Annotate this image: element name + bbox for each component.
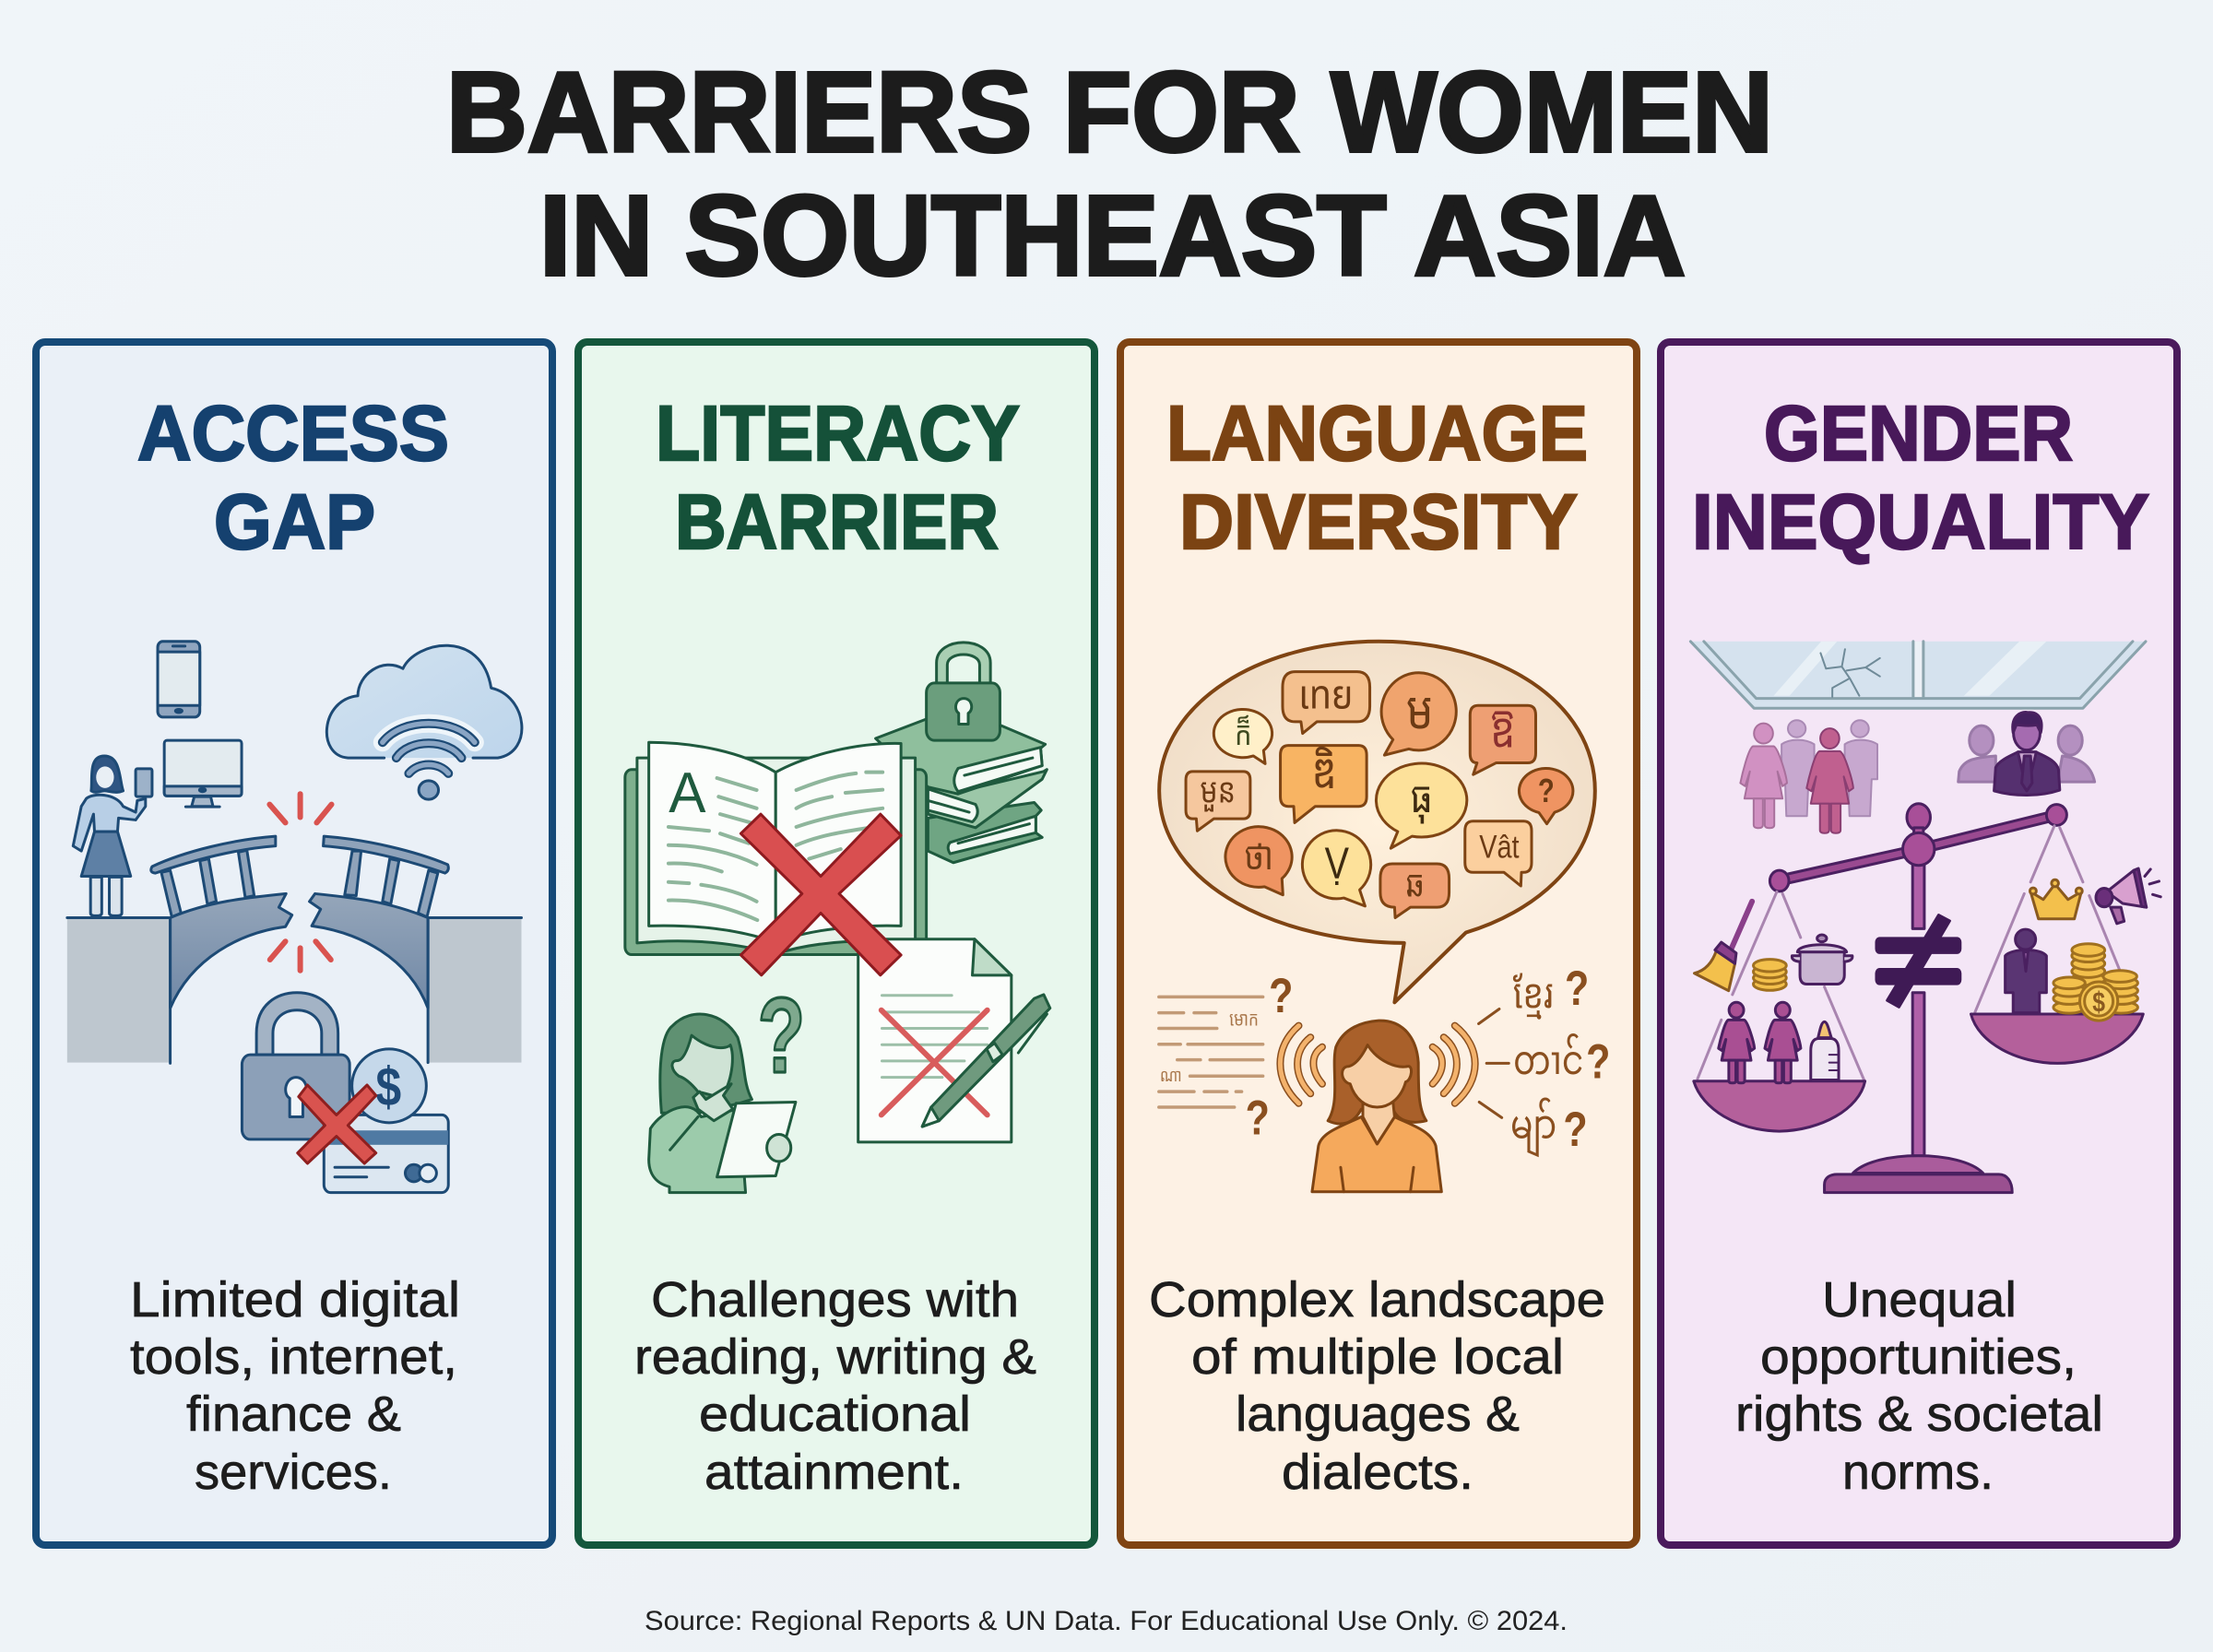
heading: gender inequality: GENDER xyxy=(1764,390,2073,477)
icon: open book: A xyxy=(669,761,706,824)
icon: women on pan xyxy=(1719,1002,1801,1083)
title xyxy=(446,50,1773,300)
description: literacy barrier: attainment. xyxy=(704,1445,964,1500)
illustration: broken bridge and digital access xyxy=(67,642,522,1193)
icon: woman listening xyxy=(1312,1021,1441,1192)
icon: megaphone xyxy=(2096,868,2160,924)
description: access gap: Limited digital xyxy=(130,1272,460,1328)
icon: broom xyxy=(1695,902,1752,991)
description: access gap xyxy=(130,1272,460,1500)
description: gender inequality: Unequal xyxy=(1822,1272,2017,1328)
cliffs xyxy=(67,918,522,1063)
icon: open book xyxy=(625,742,927,955)
icon: not equal sign xyxy=(1876,915,1960,1007)
icon: glass ceiling xyxy=(1690,642,2146,708)
icon: small coin stack xyxy=(1754,960,1786,990)
small language bubbles: เทย xyxy=(1298,671,1353,717)
large speech bubble xyxy=(1159,642,1595,1002)
small language bubbles: Ṿ xyxy=(1325,839,1349,889)
icon: stacked books with padlock xyxy=(876,643,1047,863)
description: language diversity: of multiple local xyxy=(1191,1329,1564,1385)
icon: man in suit on pan xyxy=(2006,929,2046,1013)
icon: confusing text lines: មោក xyxy=(1229,1009,1259,1031)
description: access gap: finance & xyxy=(186,1386,401,1442)
icon: confusing text lines: ? xyxy=(1269,970,1293,1023)
description: literacy barrier: educational xyxy=(699,1386,971,1442)
heading: access gap xyxy=(137,390,449,565)
description: access gap: services. xyxy=(195,1445,392,1500)
icon: credit card and coin xyxy=(324,1049,448,1193)
icon: monitor xyxy=(164,740,242,807)
icon: credit card and coin: $ xyxy=(375,1056,401,1117)
illustration: many languages xyxy=(1159,642,1610,1192)
heading: language diversity: LANGUAGE xyxy=(1166,390,1588,477)
icon: padlock xyxy=(242,993,349,1139)
icon: big red cross xyxy=(740,814,901,975)
description: language diversity: dialects. xyxy=(1282,1445,1473,1500)
title: BARRIERS FOR WOMEN xyxy=(446,50,1773,176)
icon: document with pen xyxy=(858,939,1050,1142)
illustration: unbalanced scale xyxy=(1690,642,2160,1193)
labels: local scripts with question marks: ? xyxy=(1586,1035,1610,1089)
icon: coin stacks: $ xyxy=(2092,986,2105,1018)
icon: confused woman reading: ? xyxy=(758,976,805,1095)
small language bubbles: ធុ xyxy=(1410,773,1433,824)
small language bubbles: ឱ xyxy=(1489,705,1515,759)
panel: access gap xyxy=(36,342,552,1545)
heading: access gap: ACCESS xyxy=(137,390,449,477)
small language bubbles: ម xyxy=(1406,681,1434,740)
heading: literacy barrier: LITERACY xyxy=(656,390,1020,477)
description: gender inequality: norms. xyxy=(1842,1445,1994,1500)
icon: tablet xyxy=(158,642,200,717)
small language bubbles: មួន xyxy=(1201,773,1236,811)
description: gender inequality xyxy=(1735,1272,2103,1500)
small language bubbles: ឆ xyxy=(1405,863,1425,904)
labels: local scripts with question marks xyxy=(1479,962,1610,1157)
icon: woman with phone xyxy=(73,756,152,915)
heading: gender inequality: INEQUALITY xyxy=(1692,478,2149,565)
heading: language diversity: DIVERSITY xyxy=(1179,478,1578,565)
icon: group of men in suits xyxy=(1959,713,2095,796)
labels: local scripts with question marks: မျာ် xyxy=(1510,1097,1556,1157)
source footer: Source: Regional Reports & UN Data. For Educational Use Only. © 2024. xyxy=(645,1606,1568,1636)
icon: balance scale xyxy=(1694,804,2143,1193)
icon: confusing text lines: ? xyxy=(1246,1092,1270,1146)
icon: sound waves xyxy=(1280,1026,1475,1103)
small language bubbles: Vât xyxy=(1479,829,1520,865)
heading: language diversity xyxy=(1166,390,1588,565)
description: literacy barrier: reading, writing & xyxy=(634,1329,1036,1385)
description: language diversity: Complex landscape xyxy=(1149,1272,1605,1328)
small language bubbles: ឌិ xyxy=(1311,746,1337,799)
panel: gender inequality xyxy=(1661,342,2177,1545)
icon: broken bridge xyxy=(151,836,448,1063)
description: literacy barrier xyxy=(634,1272,1036,1500)
small language bubbles: ? xyxy=(1538,772,1555,809)
title: IN SOUTHEAST ASIA xyxy=(539,173,1686,300)
icon: confusing text lines: ណា xyxy=(1160,1065,1182,1085)
description: access gap: tools, internet, xyxy=(130,1329,457,1385)
heading: access gap: GAP xyxy=(214,478,375,565)
heading: literacy barrier xyxy=(656,390,1020,565)
description: literacy barrier: Challenges with xyxy=(651,1272,1019,1328)
labels: local scripts with question marks: ? xyxy=(1563,1103,1588,1157)
small language bubbles xyxy=(1186,671,1573,918)
labels: local scripts with question marks: ? xyxy=(1565,962,1589,1016)
labels: local scripts with question marks: တၢင် xyxy=(1513,1032,1583,1083)
description: gender inequality: opportunities, xyxy=(1760,1329,2077,1385)
icon: confusing text lines xyxy=(1159,970,1293,1146)
icon: group of women xyxy=(1740,720,1877,833)
small language bubbles: ក៏ xyxy=(1235,714,1252,752)
icon: cooking pot xyxy=(1792,935,1852,985)
heading: literacy barrier: BARRIER xyxy=(675,478,999,565)
icon: baby bottle xyxy=(1811,1021,1839,1080)
small language bubbles: ថា xyxy=(1244,835,1273,879)
icon: crown xyxy=(2030,879,2082,919)
description: gender inequality: rights & societal xyxy=(1735,1386,2103,1442)
icon: coin stacks xyxy=(2053,944,2137,1021)
icon: cloud with wifi xyxy=(326,645,522,799)
illustration: blocked reading and writing xyxy=(625,643,1050,1193)
heading: gender inequality xyxy=(1692,390,2149,565)
description: language diversity: languages & xyxy=(1236,1386,1520,1442)
labels: local scripts with question marks: ខ្មែរ xyxy=(1513,971,1554,1020)
icon: confused woman reading xyxy=(649,976,805,1193)
description: language diversity xyxy=(1149,1272,1605,1500)
icon: red break sparks xyxy=(269,794,332,971)
panel: literacy barrier xyxy=(578,342,1095,1545)
icon: red cross xyxy=(298,1085,376,1163)
panel: language diversity xyxy=(1120,342,1637,1545)
